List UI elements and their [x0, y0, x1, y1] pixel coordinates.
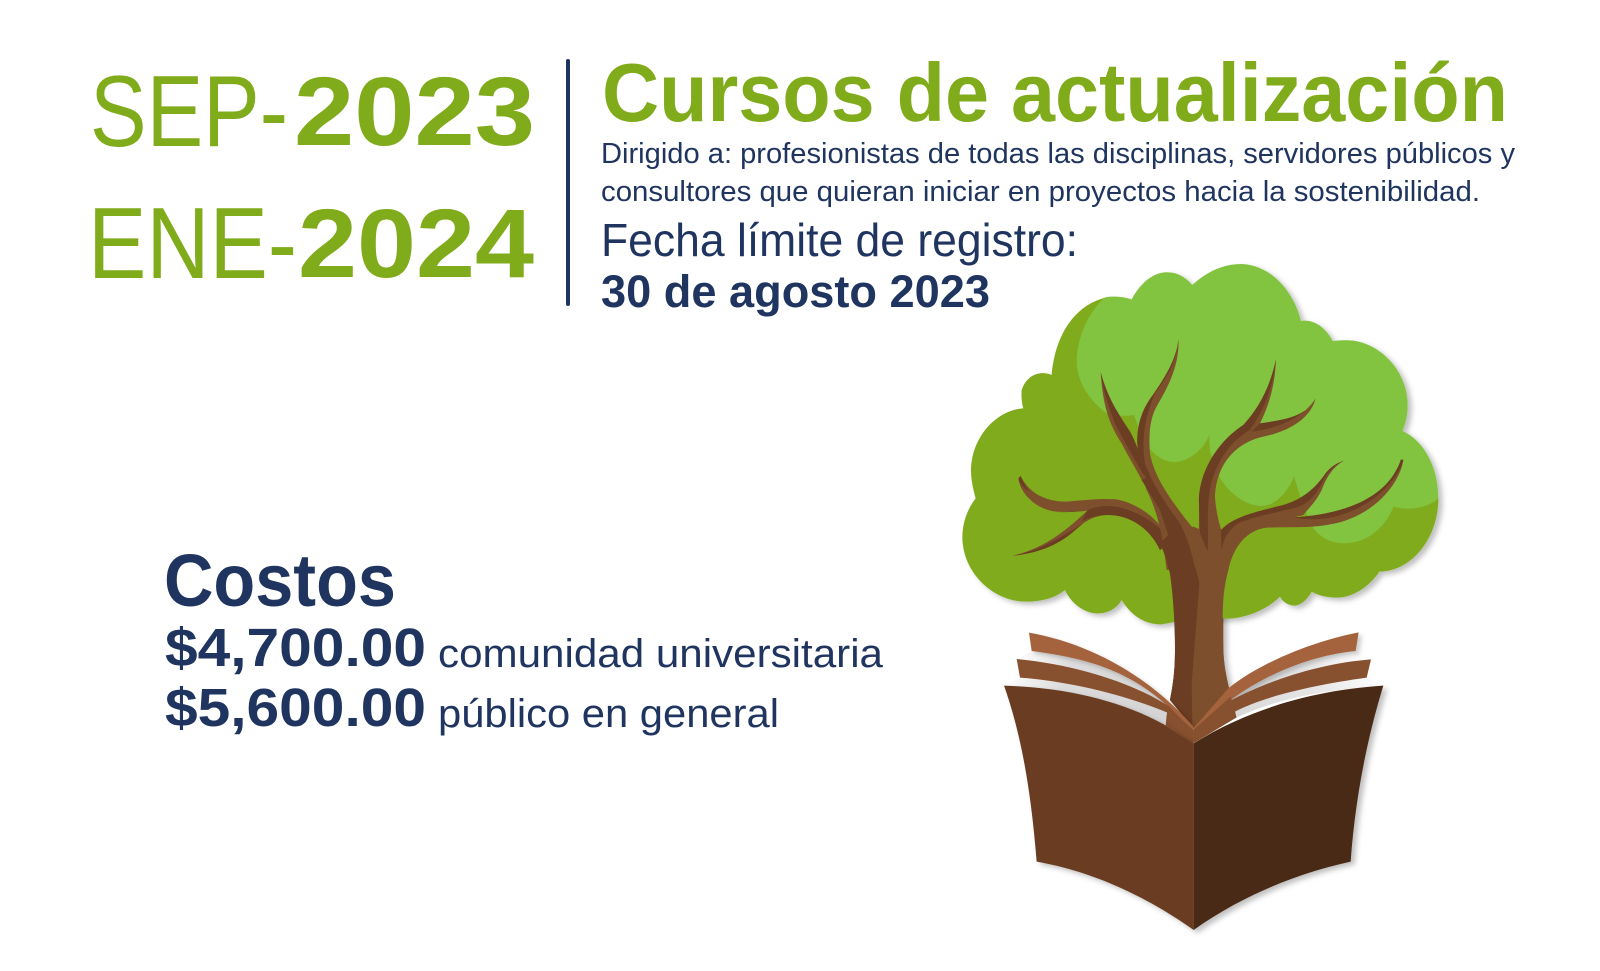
trunk dark side [1160, 530, 1199, 727]
book cover: right [1194, 686, 1383, 930]
page fill at the spine [1166, 707, 1193, 743]
title: Cursos de actualización [602, 46, 1508, 139]
registration deadline: Fecha límite de registro: [601, 214, 1078, 266]
registration deadline: 30 de agosto 2023 [601, 266, 990, 317]
date heading: ENE-2024: ENE- [88, 188, 297, 300]
central branches [1101, 339, 1316, 570]
audience description [601, 138, 1515, 208]
price: university community [165, 618, 884, 678]
date heading: SEP-2023 [90, 56, 535, 168]
trunk [1160, 527, 1233, 728]
vertical divider [566, 59, 570, 306]
left branches [1013, 476, 1173, 556]
price: university community: $4,700.00 [165, 618, 426, 678]
right branches [1217, 459, 1403, 570]
audience description: consultores que quieran iniciar en proyectos hacia la sostenibilidad. [601, 176, 1480, 208]
book cover: left [1004, 686, 1194, 930]
costs panel [164, 539, 884, 738]
price: general public: público en general [438, 692, 779, 736]
open book [1004, 632, 1383, 930]
registration deadline [601, 214, 1078, 317]
price: university community: comunidad universitaria [438, 632, 884, 676]
illustration: tree growing from open book [962, 264, 1438, 930]
date heading: ENE-2024: 2024 [298, 189, 534, 298]
date heading: ENE-2024 [88, 188, 534, 300]
tree trunk and branches [1013, 339, 1403, 728]
date heading: SEP-2023: SEP- [90, 56, 288, 168]
book pages: left [1029, 633, 1193, 732]
audience description: Dirigido a: profesionistas de todas las disciplinas, servidores públicos y [601, 138, 1515, 170]
trunk base shadow [1170, 600, 1229, 728]
tree canopy [962, 264, 1438, 624]
costs heading: Costos [164, 539, 396, 622]
price: general public [165, 678, 779, 738]
book pages: right [1193, 632, 1359, 732]
price: general public: $5,600.00 [165, 678, 426, 738]
gray gaps between pages [1017, 651, 1169, 708]
date heading: SEP-2023: 2023 [294, 57, 535, 166]
